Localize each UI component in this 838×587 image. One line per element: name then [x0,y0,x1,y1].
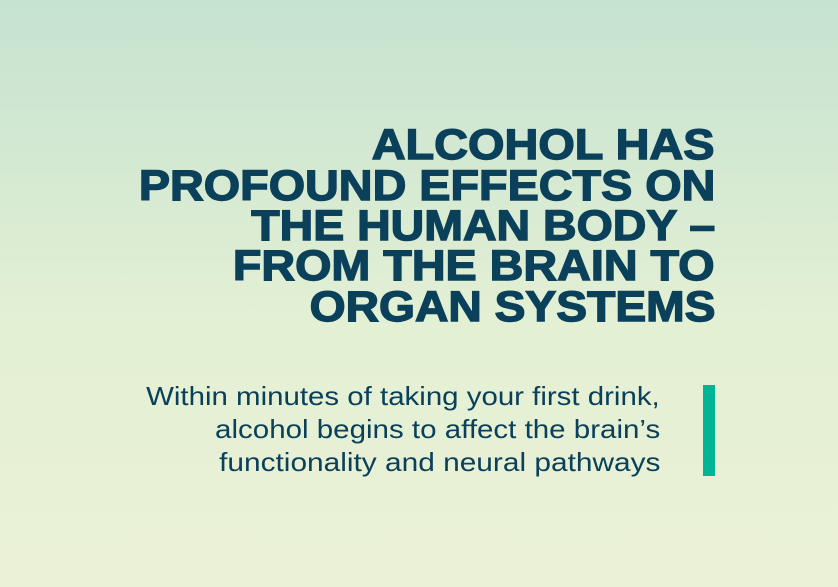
title: FROM THE BRAIN TO [233,242,715,290]
subtitle text block: alcohol begins to affect the brain’s [215,414,660,444]
title: ORGAN SYSTEMS [309,283,715,331]
title: PROFOUND EFFECTS ON [139,162,715,210]
subtitle text block: functionality and neural pathways [219,447,660,477]
subtitle text block: Within minutes of taking your first drink, [146,381,660,411]
title: THE HUMAN BODY – [251,202,715,250]
title [139,121,715,331]
title: ALCOHOL HAS [372,121,715,169]
subtitle text block [146,381,660,477]
accent bar [703,385,715,476]
